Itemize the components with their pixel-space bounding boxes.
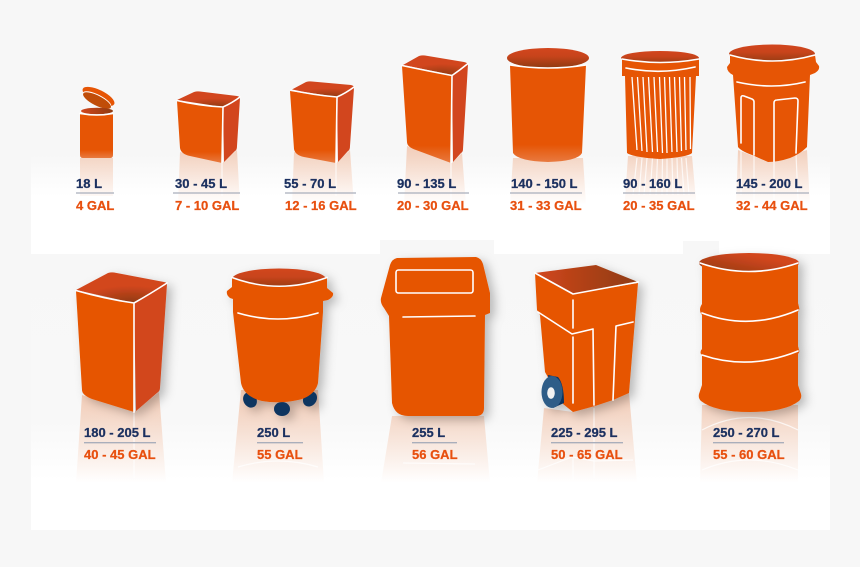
icon: cart wheel bbox=[542, 375, 564, 408]
capacity label: 55 - 70 L bbox=[284, 176, 336, 191]
icon: large rectangular bin bbox=[76, 272, 167, 412]
icon: ribbed trash can bbox=[621, 51, 699, 159]
bin: 90 - 135 L bbox=[397, 55, 469, 213]
bin: 145 - 200 L bbox=[727, 44, 819, 213]
capacity label: 250 - 270 L bbox=[713, 425, 780, 440]
bin: 30 - 45 L bbox=[173, 91, 240, 213]
capacity label: 180 - 205 L bbox=[84, 425, 151, 440]
capacity label: 250 L bbox=[257, 425, 290, 440]
icon: small can with open lid bbox=[80, 83, 117, 158]
capacity label bbox=[551, 425, 623, 462]
capacity label: 20 - 30 GAL bbox=[397, 198, 469, 213]
capacity label: 31 - 33 GAL bbox=[510, 198, 582, 213]
capacity label: 18 L bbox=[76, 176, 102, 191]
bin: 180 - 205 L bbox=[76, 272, 167, 483]
icon: bin with swing lid bbox=[381, 257, 490, 416]
capacity label: 140 - 150 L bbox=[511, 176, 578, 191]
capacity label bbox=[284, 176, 357, 213]
capacity label: 50 - 65 GAL bbox=[551, 447, 623, 462]
icon: rectangular bin bbox=[290, 81, 354, 163]
capacity label: 225 - 295 L bbox=[551, 425, 618, 440]
capacity label bbox=[736, 176, 809, 213]
capacity label bbox=[623, 176, 695, 213]
bin: 90 - 160 L bbox=[621, 51, 699, 213]
capacity label bbox=[510, 176, 582, 213]
icon: steel drum bbox=[699, 253, 801, 412]
capacity label: 12 - 16 GAL bbox=[285, 198, 357, 213]
capacity label bbox=[713, 425, 785, 462]
capacity label: 56 GAL bbox=[412, 447, 458, 462]
capacity label: 30 - 45 L bbox=[175, 176, 227, 191]
capacity label: 4 GAL bbox=[76, 198, 114, 213]
capacity label: 20 - 35 GAL bbox=[623, 198, 695, 213]
icon: tall rectangular bin bbox=[402, 55, 468, 163]
capacity label: 55 - 60 GAL bbox=[713, 447, 785, 462]
bin: 140 - 150 L bbox=[507, 48, 589, 213]
icon: wheeled cart bbox=[535, 265, 638, 412]
capacity label bbox=[76, 176, 114, 213]
icon: rectangular bin bbox=[177, 91, 240, 163]
bin: 250 - 270 L bbox=[699, 253, 801, 483]
bin: 250 L bbox=[227, 268, 333, 483]
icon: casters bbox=[240, 389, 320, 416]
panel: top row background bbox=[31, 155, 830, 254]
capacity label bbox=[257, 425, 303, 462]
capacity label bbox=[397, 176, 469, 213]
capacity label bbox=[84, 425, 156, 462]
capacity label bbox=[173, 176, 240, 213]
capacity label: 90 - 135 L bbox=[397, 176, 456, 191]
bin: 225 - 295 L bbox=[535, 265, 638, 483]
capacity label: 7 - 10 GAL bbox=[175, 198, 239, 213]
bin: 255 L bbox=[381, 257, 490, 483]
icon: round can on casters bbox=[227, 268, 333, 416]
capacity label: 32 - 44 GAL bbox=[736, 198, 808, 213]
icon: round tapered bin bbox=[507, 48, 589, 162]
panel: bottom row background bbox=[31, 254, 830, 530]
capacity label: 90 - 160 L bbox=[623, 176, 682, 191]
bin: 55 - 70 L bbox=[284, 81, 357, 213]
bin: 18 L bbox=[76, 83, 117, 213]
capacity label: 145 - 200 L bbox=[736, 176, 803, 191]
capacity label bbox=[412, 425, 458, 462]
capacity label: 55 GAL bbox=[257, 447, 303, 462]
capacity label: 255 L bbox=[412, 425, 445, 440]
icon: round can with handles bbox=[727, 44, 819, 162]
capacity label: 40 - 45 GAL bbox=[84, 447, 156, 462]
